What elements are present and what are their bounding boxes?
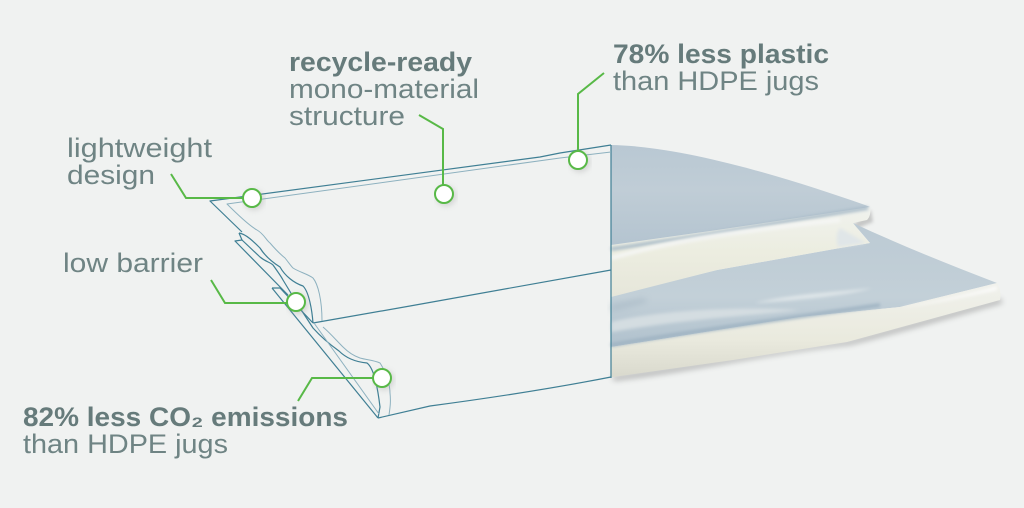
label: 82% less CO2 emissions: than HDPE jugs <box>23 429 228 459</box>
label: 78% less plastic: than HDPE jugs <box>613 66 819 96</box>
callout: 82% less CO2 emissions <box>23 369 394 459</box>
label: lightweight design: design <box>67 160 155 190</box>
label: recycle-ready: mono-material <box>289 74 479 104</box>
drop shadow <box>612 298 1003 381</box>
callout: lightweight design <box>67 133 264 210</box>
callout: low barrier <box>63 248 308 314</box>
pouch photo <box>611 145 1003 381</box>
marker <box>569 151 590 172</box>
marker <box>435 185 456 206</box>
upper panel blue <box>611 145 870 245</box>
label: low barrier: low barrier <box>63 248 203 278</box>
leader line <box>298 378 373 401</box>
callout: 78% less plastic <box>569 39 829 172</box>
label: 78% less plastic: 78% less plastic <box>613 39 829 69</box>
lower panel blue <box>611 223 997 347</box>
marker <box>373 369 394 390</box>
lower fold cream <box>611 283 1001 377</box>
leader line <box>211 280 287 303</box>
label: 82% less CO2 emissions: 82% less CO₂ emissions <box>23 402 348 432</box>
callout: recycle-ready <box>289 47 479 206</box>
pouch outline diagram <box>210 145 611 418</box>
label: lightweight design: lightweight <box>67 133 213 163</box>
marker <box>243 189 264 210</box>
upper fold cream <box>611 207 870 297</box>
label: recycle-ready: structure <box>289 101 405 131</box>
marker <box>287 293 308 314</box>
leader line <box>171 174 243 198</box>
label: recycle-ready: recycle-ready <box>289 47 472 77</box>
leader line <box>419 115 443 185</box>
leader line <box>578 73 604 151</box>
fold highlights <box>611 208 868 249</box>
